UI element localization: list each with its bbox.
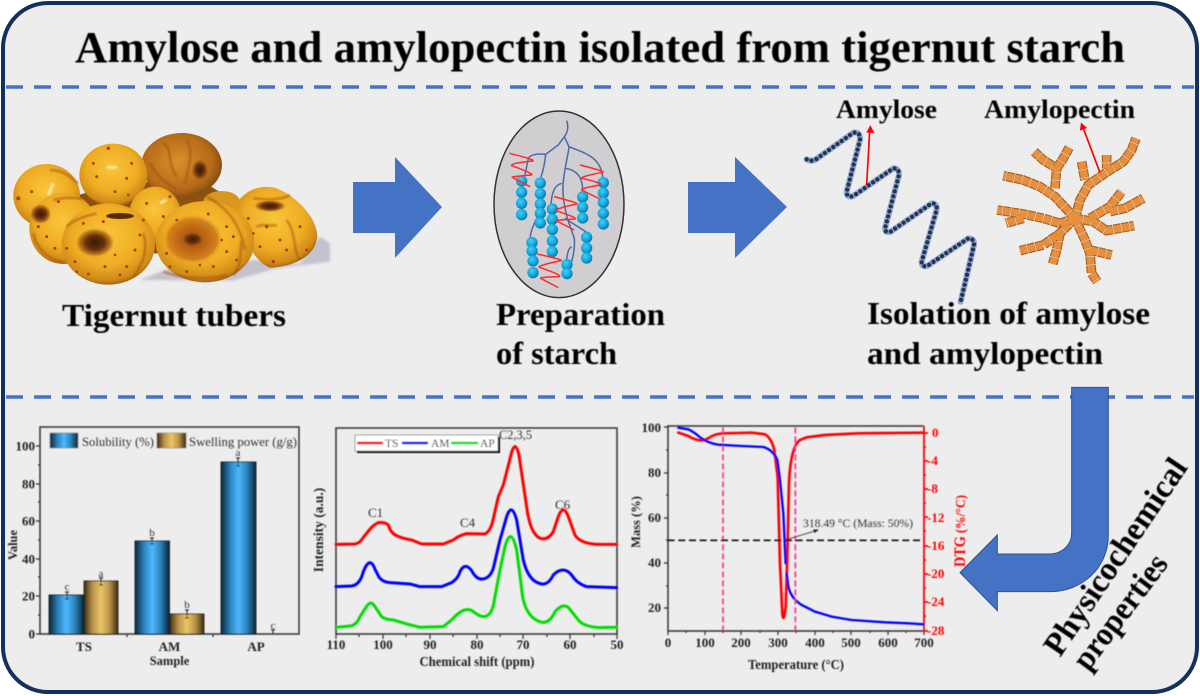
legend: TS xyxy=(385,438,398,450)
icon: tuber shadow xyxy=(140,237,330,281)
amylose zigzags xyxy=(509,153,603,288)
heading: Tigernut tubers: Tigernut tubers xyxy=(62,297,286,333)
x axis labels: 110 xyxy=(327,637,345,652)
x axis labels: 60 xyxy=(564,637,576,652)
legend: AP xyxy=(480,438,495,450)
branch lines xyxy=(525,121,603,262)
icon: tuber front right xyxy=(156,201,254,282)
left axis labels: 40 xyxy=(648,555,661,570)
line chart: NMR spectra xyxy=(311,427,624,670)
peak labels: C1 xyxy=(368,505,383,520)
y axis labels: 80 xyxy=(22,476,35,492)
legend: Solubility (%) xyxy=(82,434,154,449)
bar chart: solubility and swelling power: a xyxy=(99,568,104,580)
heading: Isolation of amylose and amylopectin: Isolation of amylose xyxy=(867,295,1150,331)
x axis labels: 200 xyxy=(731,635,751,650)
plot frame xyxy=(40,427,299,634)
icon: amylopectin branches xyxy=(997,138,1143,282)
bar chart: solubility and swelling power: c xyxy=(271,620,276,632)
heading: Amylopectin: Amylopectin xyxy=(984,95,1136,124)
plot frame xyxy=(336,428,617,634)
fifty percent mass line xyxy=(668,538,924,543)
icon: tuber back left xyxy=(13,164,80,227)
x axis labels xyxy=(327,637,624,652)
category labels: AP xyxy=(247,639,265,654)
arrow: amylose pointer xyxy=(866,125,874,185)
arrow: isolation to physicochemical properties xyxy=(960,387,1108,611)
panel: tigernut tubers photo xyxy=(13,133,330,285)
y axis labels: 0 xyxy=(28,626,35,642)
x axis ticks xyxy=(336,634,617,639)
legend: Swelling power (g/g) xyxy=(189,434,297,449)
bar chart: solubility and swelling power: b xyxy=(184,599,190,611)
peak labels: C6 xyxy=(555,497,571,512)
right axis xyxy=(924,426,928,631)
heading: Physicochemical properties xyxy=(1037,452,1195,677)
dtg curve xyxy=(678,433,923,618)
icon: tuber surface marks xyxy=(16,140,308,278)
x axis title: Sample xyxy=(150,654,190,668)
right axis labels: -12 xyxy=(927,510,944,525)
significance letters: c xyxy=(65,581,70,593)
x axis labels: 100 xyxy=(695,635,715,650)
x axis labels: 600 xyxy=(878,635,898,650)
x axis title: Temperature (°C) xyxy=(748,658,844,673)
x axis title: Chemical shift (ppm) xyxy=(420,655,535,670)
bars xyxy=(49,462,256,634)
peak labels: C4 xyxy=(460,515,476,530)
y axis labels xyxy=(16,438,35,642)
y axis labels: 20 xyxy=(22,588,35,604)
x axis labels: 50 xyxy=(610,637,624,652)
right axis labels: -4 xyxy=(927,453,938,468)
annotation arrow xyxy=(785,531,815,540)
right axis labels: -8 xyxy=(927,481,938,496)
x axis labels: 700 xyxy=(914,635,934,650)
left axis labels xyxy=(642,420,661,615)
label line: Physicochemical: Physicochemical xyxy=(1037,452,1195,662)
y axis title: Value xyxy=(6,530,20,560)
x axis labels: 400 xyxy=(805,635,825,650)
arrow: amylopectin pointer xyxy=(1080,122,1100,173)
heading: Isolation of amylose and amylopectin: and amylopectin xyxy=(867,335,1103,371)
left axis title: Mass (%) xyxy=(629,496,643,548)
amylopectin beads xyxy=(516,175,609,279)
y axis labels: 100 xyxy=(16,438,35,454)
line chart: thermogravimetric analysis xyxy=(629,420,969,673)
right axis labels: -20 xyxy=(927,566,944,581)
heading: Amylose: Amylose xyxy=(836,95,937,124)
bar chart: solubility and swelling power: b xyxy=(149,527,155,539)
spectra curves xyxy=(336,447,617,628)
icon: tuber right xyxy=(235,187,317,268)
left axis labels: 100 xyxy=(642,420,661,435)
category labels: TS xyxy=(76,639,92,654)
y axis labels: 60 xyxy=(22,514,35,528)
right axis labels: -24 xyxy=(927,594,945,609)
icon: tuber small right xyxy=(203,191,240,212)
annotation text: 318.49 °C (Mass: 50%) xyxy=(803,516,913,530)
left axis labels: 60 xyxy=(648,510,661,525)
bar chart: solubility and swelling power xyxy=(6,427,299,668)
plot axes xyxy=(668,426,924,631)
right axis labels xyxy=(927,425,945,638)
left and bottom ticks xyxy=(664,427,924,635)
x axis labels: 100 xyxy=(373,637,393,652)
x axis labels: 90 xyxy=(424,637,436,652)
icon: amylose helix xyxy=(807,133,974,302)
icon: tuber back top centre xyxy=(79,144,147,206)
arrow: tubers to starch xyxy=(353,157,442,258)
x axis labels: 0 xyxy=(665,635,671,650)
right axis labels: -16 xyxy=(927,538,945,553)
icon: tuber back top right xyxy=(141,133,222,197)
left axis labels: 20 xyxy=(648,600,661,615)
legend xyxy=(355,435,500,453)
granule body xyxy=(494,111,624,298)
right axis labels: 0 xyxy=(932,425,938,440)
legend: AM xyxy=(431,438,450,450)
icon: tuber middle xyxy=(129,187,181,243)
title: Amylose and amylopectin isolated from tigernut starch xyxy=(75,23,1125,72)
heading: Preparation of starch: Preparation xyxy=(496,296,665,332)
mass curve xyxy=(678,428,923,624)
x axis labels: 500 xyxy=(841,635,861,650)
left axis labels: 80 xyxy=(648,465,661,480)
right axis title: DTG (%/°C) xyxy=(952,495,969,567)
icon: tuber front left xyxy=(62,203,155,285)
y axis labels: 40 xyxy=(22,552,35,566)
x axis labels: 80 xyxy=(470,637,484,652)
y axis title: Intensity (a.u.) xyxy=(311,488,326,572)
icon: starch granule xyxy=(494,111,624,298)
x axis labels: 70 xyxy=(516,637,530,652)
label line: properties: properties xyxy=(1066,547,1176,677)
heading: Preparation of starch: of starch xyxy=(496,335,617,371)
x axis labels xyxy=(665,635,934,650)
reference lines and curves xyxy=(668,427,924,631)
error bars xyxy=(65,458,275,634)
right axis labels: -28 xyxy=(927,623,945,638)
peak labels xyxy=(368,427,571,530)
legend xyxy=(50,433,297,449)
category labels xyxy=(76,639,265,654)
bar chart: solubility and swelling power: a xyxy=(236,447,241,459)
arrow: starch to isolation xyxy=(688,157,787,258)
y axis ticks xyxy=(36,446,213,637)
icon: tuber lower left xyxy=(29,193,97,264)
temperature limits xyxy=(723,427,795,631)
x axis labels: 300 xyxy=(768,635,788,650)
peak labels: C2,3,5 xyxy=(499,427,532,442)
category labels: AM xyxy=(159,639,180,654)
icon: crevice shadow xyxy=(73,180,240,253)
